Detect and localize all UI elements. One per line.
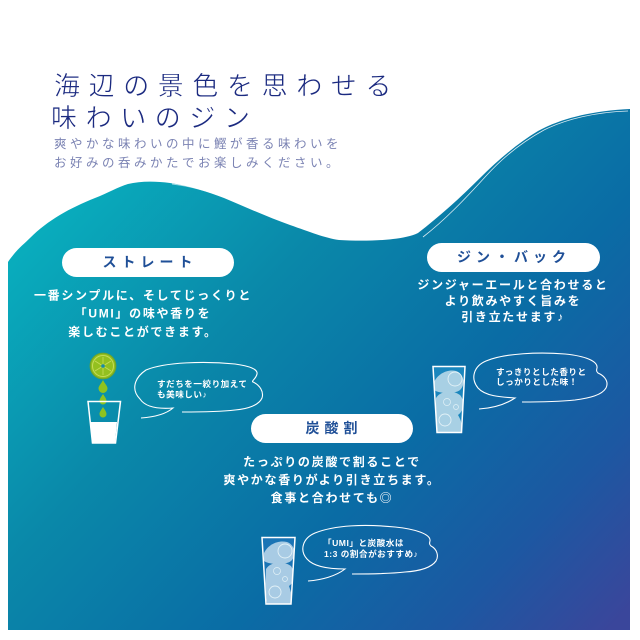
title: 海辺の景色を思わせる <box>54 71 400 101</box>
text block: gin buck: より飲みやすく旨みを <box>445 293 581 308</box>
text block: gin buck <box>417 277 609 324</box>
speech bubble: straight: すだちを一絞り加えて <box>157 378 248 389</box>
text block: soda: 食事と合わせても◎ <box>271 490 393 505</box>
heading pill: soda: 炭酸割 <box>306 420 362 436</box>
speech bubble: gin buck <box>474 353 607 409</box>
text block: soda: たっぷりの炭酸で割ることで <box>243 454 421 469</box>
subtitle <box>54 136 342 170</box>
text block: straight <box>34 288 252 339</box>
heading pill: soda <box>251 414 413 443</box>
text block: soda: 爽やかな香りがより引き立ちます。 <box>223 472 441 487</box>
subtitle: 爽やかな味わいの中に鰹が香る味わいを <box>54 136 342 151</box>
title <box>51 71 400 133</box>
speech bubble: straight: も美味しい♪ <box>157 388 207 400</box>
heading pill: gin buck: ジン・バック <box>457 249 571 265</box>
icon: sudachi and glass <box>88 353 120 443</box>
speech bubble: straight <box>135 362 263 418</box>
panel: soda <box>223 414 441 605</box>
speech bubble: gin buck: しっかりとした味！ <box>496 376 578 387</box>
text block: soda <box>223 454 441 505</box>
text block: gin buck: ジンジャーエールと合わせると <box>417 277 609 292</box>
heading pill: straight <box>62 248 234 277</box>
icon: tall glass with ice <box>432 366 466 434</box>
title: 味わいのジン <box>51 103 259 133</box>
wave background panel <box>8 109 630 630</box>
panel: straight <box>34 248 263 443</box>
speech bubble: soda: 「UMI」と炭酸水は <box>323 537 404 548</box>
text block: straight: 一番シンプルに、そしてじっくりと <box>34 288 252 302</box>
panel: gin buck <box>417 243 609 434</box>
speech bubble: gin buck: すっきりとした香りと <box>496 366 587 377</box>
text block: straight: 楽しむことができます。 <box>68 324 218 339</box>
icon: tall glass with ice <box>260 537 298 605</box>
heading pill: gin buck <box>427 243 600 272</box>
text block: straight: 「UMI」の味や香りを <box>75 306 211 320</box>
speech bubble: soda <box>303 525 437 581</box>
subtitle: お好みの呑みかたでお楽しみください。 <box>54 155 342 170</box>
heading pill: straight: ストレート <box>102 254 198 270</box>
text block: gin buck: 引き立たせます♪ <box>461 309 565 324</box>
speech bubble: soda: 1:3 の割合がおすすめ♪ <box>324 548 418 559</box>
